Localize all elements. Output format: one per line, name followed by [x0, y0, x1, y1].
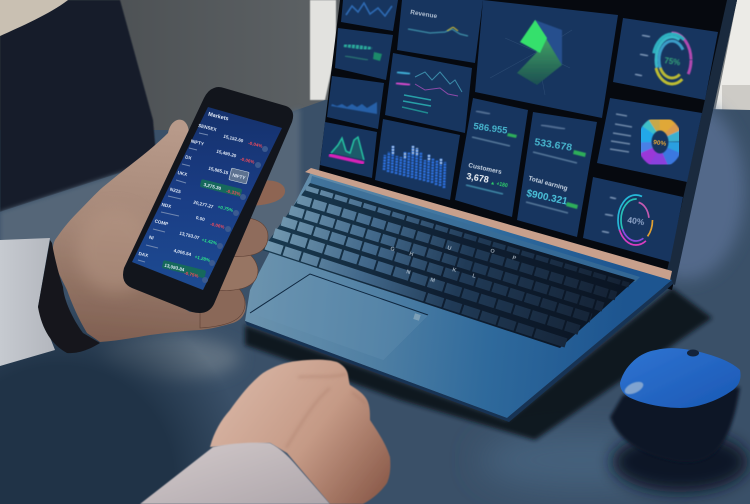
row: NI: NI [149, 235, 154, 241]
panel: total earning [517, 112, 597, 237]
key legends: K [451, 267, 457, 274]
value: 586.955: 586.955 [473, 121, 509, 137]
row: N225: +0.75% [217, 204, 234, 213]
phone screen [132, 107, 282, 290]
hinge shadow line [310, 176, 640, 282]
trackpad [250, 274, 428, 360]
row: UKX [176, 170, 246, 200]
row: COMP [153, 218, 223, 249]
mouse [610, 348, 748, 492]
row: DAX: 13,093.84 [164, 263, 185, 273]
mouse scroll button [687, 350, 699, 356]
panel: sales lines [385, 53, 472, 133]
tag: NIFTY: NIFTY [232, 172, 246, 181]
legend lines [610, 114, 632, 152]
row: DX [182, 154, 229, 176]
right hand knuckle shading [286, 374, 366, 448]
row: NDX: 0.00 [195, 215, 206, 222]
row: NI: +1.28% [194, 254, 211, 263]
background: wall and chair [0, 0, 750, 212]
row: UKX: UKX [177, 170, 189, 177]
panel: top left chart [341, 0, 398, 31]
key legends: U [446, 245, 452, 252]
row: SENSEX: SENSEX [198, 123, 218, 132]
left hand palm and thumb [53, 120, 246, 342]
row: COMP: 13,753.07 [179, 231, 200, 241]
mouse top shell [620, 348, 741, 408]
row: NI [146, 235, 215, 266]
index finger [245, 180, 285, 206]
lid right edge [665, 0, 737, 285]
value: 40%: 40% [627, 215, 645, 227]
little finger [200, 280, 245, 328]
panel: donut chart [597, 98, 702, 182]
row: DX: DX [185, 154, 193, 161]
panel: revenue line chart [397, 0, 483, 63]
ring finger [210, 247, 258, 291]
value: 90%: 90% [653, 139, 667, 148]
row: NIFTY: -0.06% [240, 156, 255, 165]
key legends: N [405, 269, 411, 276]
panel: radar chart [475, 0, 618, 118]
phone app list [138, 112, 268, 283]
row: COMP: +1.42% [201, 237, 218, 246]
rose gold hinge [305, 168, 672, 280]
row: NDX [161, 202, 231, 232]
row: COMP: COMP [154, 218, 169, 227]
panel: customers [455, 98, 528, 217]
laptop lid bezel [318, 0, 737, 290]
phone body [123, 87, 293, 313]
panel: wave chart [327, 76, 384, 129]
front edge of base [245, 280, 673, 422]
row: N225: N225 [169, 187, 182, 194]
row: SENSEX: -0.04% [248, 140, 263, 149]
key legends [389, 245, 517, 284]
row: NIFTY [189, 139, 261, 168]
mouse base [610, 387, 740, 462]
laptop [245, 0, 737, 422]
dashboard screen [320, 0, 718, 262]
mouse shadow [612, 432, 748, 492]
palm shading [77, 208, 153, 292]
middle finger [225, 218, 268, 257]
key legends: O [489, 248, 496, 255]
right hand [210, 360, 390, 504]
panel: 40% gauge [583, 177, 683, 262]
value: ring center: 75% [664, 56, 681, 67]
row: N225 [168, 187, 239, 216]
keyboard keys [266, 188, 629, 343]
sleeve: left shirt cuff [0, 238, 55, 366]
heading: customers: Customers [468, 162, 503, 176]
header: Markets [207, 112, 229, 122]
row: NDX: -0.06% [210, 221, 225, 230]
value: 3,678: 3,678 [466, 171, 490, 185]
delta: customers: ▲ +180 [490, 180, 508, 189]
key legends: M [429, 277, 436, 284]
panel: teal metrics [335, 28, 393, 80]
shadow under laptop [245, 288, 712, 440]
row: NIFTY: 15,490.20 [216, 149, 237, 159]
value: 533.678: 533.678 [534, 136, 573, 154]
left hand fingers [200, 180, 285, 328]
row: DX: 15,865.15 [208, 166, 229, 176]
row: NDX: NDX [161, 202, 173, 209]
row: N225: 20,277.27 [193, 200, 214, 210]
value: $900.321: $900.321 [525, 188, 569, 208]
row: SENSEX [198, 123, 268, 152]
mouse highlight [623, 379, 645, 397]
row: DAX: -0.75% [184, 270, 199, 279]
fingerprint reader [413, 313, 421, 321]
donut ring [644, 124, 676, 160]
right shirt sleeve [140, 443, 330, 504]
laptop base deck [245, 170, 672, 418]
row: DAX [138, 251, 208, 283]
key legends: L [471, 273, 477, 280]
row: UKX: -0.33% [226, 188, 241, 197]
heading: total earning: Total earning [527, 175, 568, 192]
panel: ring chart [613, 18, 718, 100]
row: NI: 4,006.54 [173, 248, 192, 257]
row: SENSEX: 15,152.60 [223, 134, 244, 144]
key legends: P [511, 255, 517, 262]
panel: dot bar chart [375, 119, 460, 200]
key legends: G [389, 246, 395, 253]
tag: NIFTY [229, 168, 249, 184]
row: UKX: 3,275.30 [203, 182, 222, 191]
heading: revenue: Revenue [410, 9, 438, 20]
panel: peak chart [320, 122, 377, 178]
watch band [38, 240, 100, 353]
key legends: H [408, 251, 414, 258]
row: DAX: DAX [138, 251, 150, 258]
delta: earning [566, 202, 578, 209]
keyboard well [262, 183, 635, 348]
row: NIFTY: NIFTY [190, 139, 204, 147]
phone [123, 87, 293, 313]
